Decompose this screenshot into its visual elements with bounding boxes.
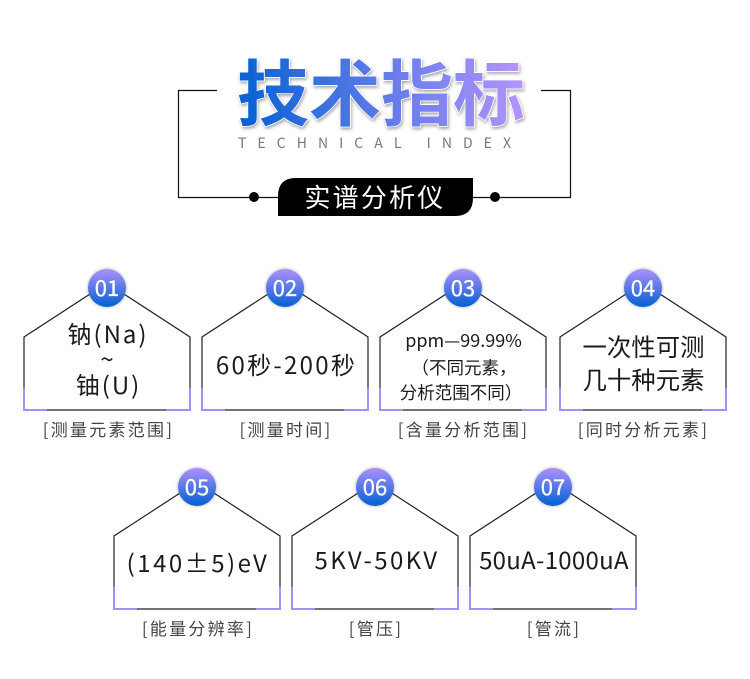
card 02: [测量时间] (240, 416, 332, 441)
card 06 (292, 468, 458, 640)
card 04: 04 (631, 271, 655, 303)
card 05: 05 (185, 470, 209, 502)
card 01: 钠(Na) (67, 315, 149, 350)
card 04: 一次性可测 (583, 329, 704, 364)
right dot (490, 192, 500, 202)
card 01 (24, 269, 190, 441)
card 07: [管流] (527, 615, 581, 640)
card 05: (140±5)eV (127, 544, 269, 579)
card 07: 50uA-1000uA (479, 541, 629, 576)
card 06: 5KV-50KV (315, 541, 439, 576)
title: 技术指标 (237, 36, 525, 141)
card 03: 03 (451, 271, 475, 303)
subtitle: TECHNICAL INDEX (238, 133, 522, 153)
card 01: ~ (100, 340, 114, 375)
subtitle badge: 实谱分析仪 (304, 178, 446, 215)
card 01: 铀(U) (76, 366, 141, 401)
card 01: 01 (95, 271, 119, 303)
header frame (178, 90, 570, 198)
card 04 (560, 269, 726, 441)
card 06: 06 (363, 470, 387, 502)
card 05 (114, 468, 280, 640)
card 03: （不同元素， (412, 355, 516, 380)
card 05: [能量分辨率] (142, 615, 254, 640)
card 06: [管压] (349, 615, 403, 640)
card 01: [测量元素范围] (43, 416, 174, 441)
card 03: ppm—99.99% (405, 327, 522, 353)
card 07: 07 (541, 470, 565, 502)
card 04: [同时分析元素] (578, 416, 709, 441)
card 07 (470, 468, 636, 640)
card 03: 分析范围不同） (400, 380, 522, 405)
card 04: 几十种元素 (583, 362, 704, 397)
card 02: 60秒-200秒 (216, 346, 357, 381)
card 03: [含量分析范围] (398, 416, 529, 441)
left dot (249, 192, 259, 202)
card 03 (380, 269, 546, 441)
card 02: 02 (273, 271, 297, 303)
card 02 (202, 269, 368, 441)
